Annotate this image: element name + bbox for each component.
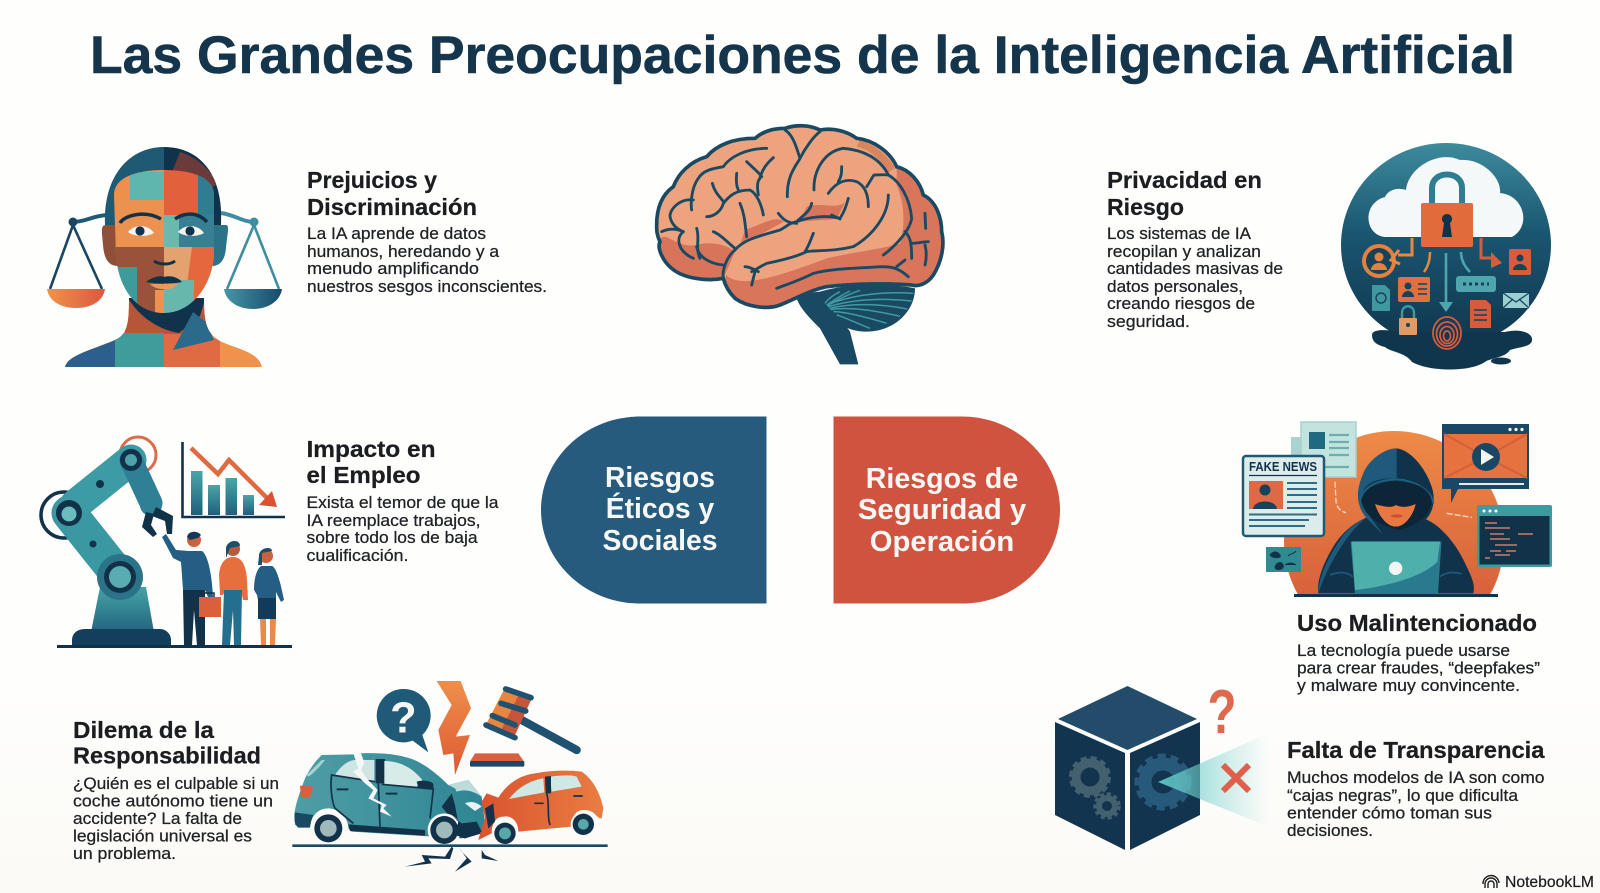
text block bbox=[1287, 769, 1544, 840]
icon: cloud lock with data icons bbox=[1341, 143, 1551, 370]
heading bbox=[73, 717, 261, 768]
text block bbox=[1297, 642, 1540, 695]
text block: legislación universal es bbox=[73, 828, 252, 846]
icon: hooded hacker with fake news bbox=[1242, 421, 1552, 597]
illustration: brain bbox=[657, 126, 943, 364]
panel: falta de transparencia bbox=[1055, 678, 1545, 850]
text block: cualificación. bbox=[306, 547, 408, 565]
panel: impacto en el empleo bbox=[41, 436, 499, 648]
badge: riesgos de seguridad y operación: Riesgos de bbox=[866, 463, 1018, 495]
icon: black box cube with gears: ? bbox=[1208, 678, 1236, 747]
heading: Discriminación bbox=[307, 194, 477, 220]
heading bbox=[307, 167, 477, 220]
icon: car crash with gavel bbox=[292, 681, 608, 872]
text block: IA reemplace trabajos, bbox=[306, 512, 480, 530]
heading: Responsabilidad bbox=[73, 742, 261, 768]
text block bbox=[306, 494, 499, 565]
text block: Exista el temor de que la bbox=[306, 494, 499, 512]
text block: nuestros sesgos inconscientes. bbox=[307, 278, 547, 296]
text block: cantidades masivas de bbox=[1107, 260, 1283, 278]
text block: ¿Quién es el culpable si un bbox=[73, 775, 279, 793]
text block: humanos, heredando y a bbox=[307, 243, 500, 261]
heading: Dilema de la bbox=[73, 717, 215, 743]
text block: entender cómo toman sus bbox=[1287, 804, 1492, 822]
text block: recopilan y analizan bbox=[1107, 243, 1261, 261]
text block: Muchos modelos de IA son como bbox=[1287, 769, 1544, 787]
panel: prejuicios y discriminación bbox=[47, 147, 547, 370]
badge: riesgos éticos y sociales: Sociales bbox=[602, 525, 718, 557]
text block: La tecnología puede usarse bbox=[1297, 642, 1510, 660]
text block: menudo amplificando bbox=[307, 260, 479, 278]
heading: Riesgo bbox=[1107, 194, 1184, 220]
badge: riesgos éticos y sociales: Riesgos bbox=[605, 462, 715, 494]
text block: datos personales, bbox=[1107, 278, 1243, 296]
badge: riesgos éticos y sociales bbox=[541, 416, 766, 604]
panel: privacidad en riesgo bbox=[1107, 143, 1551, 370]
logo: NotebookLM: NotebookLM bbox=[1505, 874, 1594, 891]
text block: La IA aprende de datos bbox=[307, 225, 486, 243]
text block: sobre todo los de baja bbox=[306, 529, 478, 547]
heading bbox=[306, 436, 436, 488]
text block: creando riesgos de bbox=[1107, 295, 1255, 313]
icon: car crash with gavel: ? bbox=[390, 694, 417, 742]
icon: split face with scales bbox=[47, 147, 282, 370]
text block: coche autónomo tiene un bbox=[73, 792, 273, 810]
icon: black box cube with gears bbox=[1055, 678, 1269, 850]
heading: Prejuicios y bbox=[307, 167, 437, 193]
text block: y malware muy convincente. bbox=[1297, 677, 1520, 695]
heading: el Empleo bbox=[306, 462, 420, 488]
icon: hooded hacker with fake news: FAKE NEWS bbox=[1249, 459, 1317, 474]
heading: Impacto en bbox=[306, 436, 436, 462]
badge: riesgos éticos y sociales: Éticos y bbox=[606, 491, 714, 525]
text block: Los sistemas de IA bbox=[1107, 225, 1251, 243]
heading: Privacidad en bbox=[1107, 167, 1262, 193]
text block bbox=[1107, 225, 1283, 331]
panel: dilema de la responsabilidad bbox=[73, 681, 608, 872]
badge: riesgos de seguridad y operación: Operación bbox=[870, 526, 1014, 558]
heading bbox=[1107, 167, 1262, 220]
heading: Uso Malintencionado bbox=[1297, 610, 1537, 636]
badge: riesgos de seguridad y operación bbox=[834, 416, 1060, 604]
text block: un problema. bbox=[73, 845, 176, 863]
text block bbox=[307, 225, 547, 296]
badge: riesgos de seguridad y operación: Seguridad y bbox=[858, 494, 1026, 526]
panel: uso malintencionado bbox=[1243, 422, 1552, 695]
text block: “cajas negras”, lo que dificulta bbox=[1287, 787, 1519, 805]
text block bbox=[73, 775, 279, 863]
heading: Falta de Transparencia bbox=[1287, 737, 1545, 763]
icon: robot arm and people bbox=[41, 437, 292, 648]
text block: seguridad. bbox=[1107, 313, 1190, 331]
text block: para crear fraudes, “deepfakes” bbox=[1297, 660, 1540, 678]
title: Las Grandes Preocupaciones de la Inteligencia Artificial bbox=[90, 26, 1515, 85]
text block: decisiones. bbox=[1287, 822, 1373, 840]
text block: accidente? La falta de bbox=[73, 810, 242, 828]
